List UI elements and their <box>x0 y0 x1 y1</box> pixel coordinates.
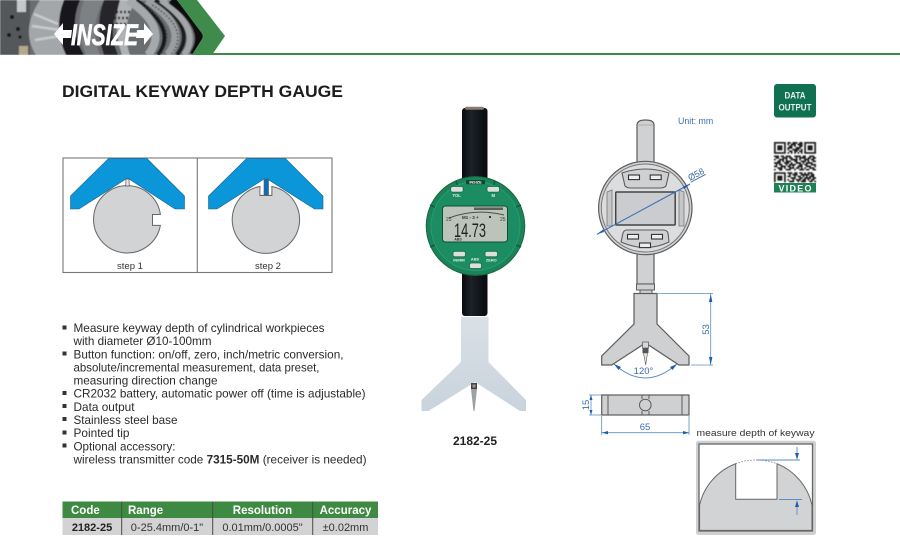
LCD screen: 25 <box>500 217 506 223</box>
header banner <box>0 0 900 55</box>
table header: Accuracy <box>320 505 372 517</box>
digital display dial: INSIZE <box>469 180 482 184</box>
LCD screen: M1 - 3 + <box>462 215 479 220</box>
step 2 label: step 2 <box>255 261 281 272</box>
table row: 0.01mm/0.0005" <box>222 522 303 534</box>
diameter callout: Ø58 <box>686 166 706 183</box>
dimension: 120 degrees: 120° <box>634 366 654 377</box>
panel: measuring steps <box>63 158 332 272</box>
logo: INSIZE: INSIZE <box>71 19 139 52</box>
feature list: absolute/incremental measurement, data preset, <box>74 361 320 374</box>
digital display dial: M <box>492 193 496 198</box>
table row: 2182-25 <box>72 522 112 534</box>
technical drawing: base side view <box>602 395 689 415</box>
data output badge: OUTPUT <box>778 102 812 112</box>
diameter callout <box>597 166 706 234</box>
step 2 diagram <box>208 158 323 253</box>
dial outline <box>599 161 692 255</box>
product photo: gauge <box>422 107 526 411</box>
table header: Range <box>128 505 163 517</box>
step 1 diagram <box>70 158 184 253</box>
digital display dial <box>426 176 525 276</box>
keyway depth caption: measure depth of keyway <box>696 428 815 439</box>
digital display dial: ZERO <box>486 257 497 262</box>
feature list: wireless transmitter code 7315-50M (receiver is needed) <box>72 453 367 466</box>
spindle outline <box>636 120 654 294</box>
keyway depth diagram <box>696 441 816 535</box>
green rule <box>212 53 900 55</box>
spec table <box>62 502 378 535</box>
dimension: 15 <box>581 395 601 415</box>
QR code with video label: VIDEO <box>778 184 812 194</box>
feature list: Pointed tip <box>74 427 130 440</box>
feature list <box>62 322 367 466</box>
feature list: CR2032 battery, automatic power off (time is adjustable) <box>74 388 366 401</box>
feature list: Measure keyway depth of cylindrical workpieces <box>74 322 325 335</box>
LCD screen: ABS <box>454 238 462 242</box>
table header <box>71 505 372 517</box>
technical drawing: base front <box>602 294 689 365</box>
steel base <box>422 317 526 411</box>
digital display dial: IN/MM <box>453 257 465 262</box>
step 1 label: step 1 <box>117 261 143 272</box>
QR code with video label <box>774 143 816 194</box>
dimension: 15: 15 <box>581 400 592 410</box>
digital display dial: TOL <box>453 193 461 198</box>
drawing tip <box>642 342 648 365</box>
technical drawing: front view <box>597 120 706 294</box>
feature list: measuring direction change <box>74 374 218 388</box>
feature list: Button function: on/off, zero, inch/metric conversion, <box>74 348 344 361</box>
table header: Resolution <box>233 505 292 517</box>
LCD screen: 25 <box>446 217 452 223</box>
LCD screen: 14.73 <box>454 221 486 242</box>
feature list: Optional accessory: <box>74 440 176 453</box>
black spindle <box>462 107 488 316</box>
depth arrows <box>756 447 802 515</box>
pointed tip <box>471 383 477 411</box>
machinery photo <box>0 0 210 55</box>
data output badge <box>774 84 816 118</box>
dimension: 65 <box>602 416 689 435</box>
bottom buttons <box>453 251 498 268</box>
data output badge: DATA <box>784 90 806 100</box>
table row: 0-25.4mm/0-1" <box>131 522 203 534</box>
feature list: Data output <box>74 401 135 414</box>
table row: ±0.02mm <box>323 522 368 534</box>
dimension: 53 <box>658 294 713 365</box>
dimension: 53: 53 <box>701 324 712 335</box>
LCD screen <box>442 206 508 242</box>
dial brand <box>466 180 485 184</box>
dimension: 120 degrees <box>614 364 677 378</box>
top buttons <box>451 186 500 192</box>
model label: 2182-25 <box>453 434 497 448</box>
title: DIGITAL KEYWAY DEPTH GAUGE <box>62 83 343 101</box>
digital display dial: ABS <box>471 256 480 262</box>
green chevron <box>177 0 225 55</box>
feature list: with diameter Ø10-100mm <box>72 335 212 348</box>
feature list: Stainless steel base <box>74 414 178 427</box>
dimension: 65: 65 <box>640 422 650 433</box>
table header: Code <box>71 505 100 517</box>
table row <box>72 522 368 534</box>
unit note: Unit: mm <box>678 116 713 126</box>
